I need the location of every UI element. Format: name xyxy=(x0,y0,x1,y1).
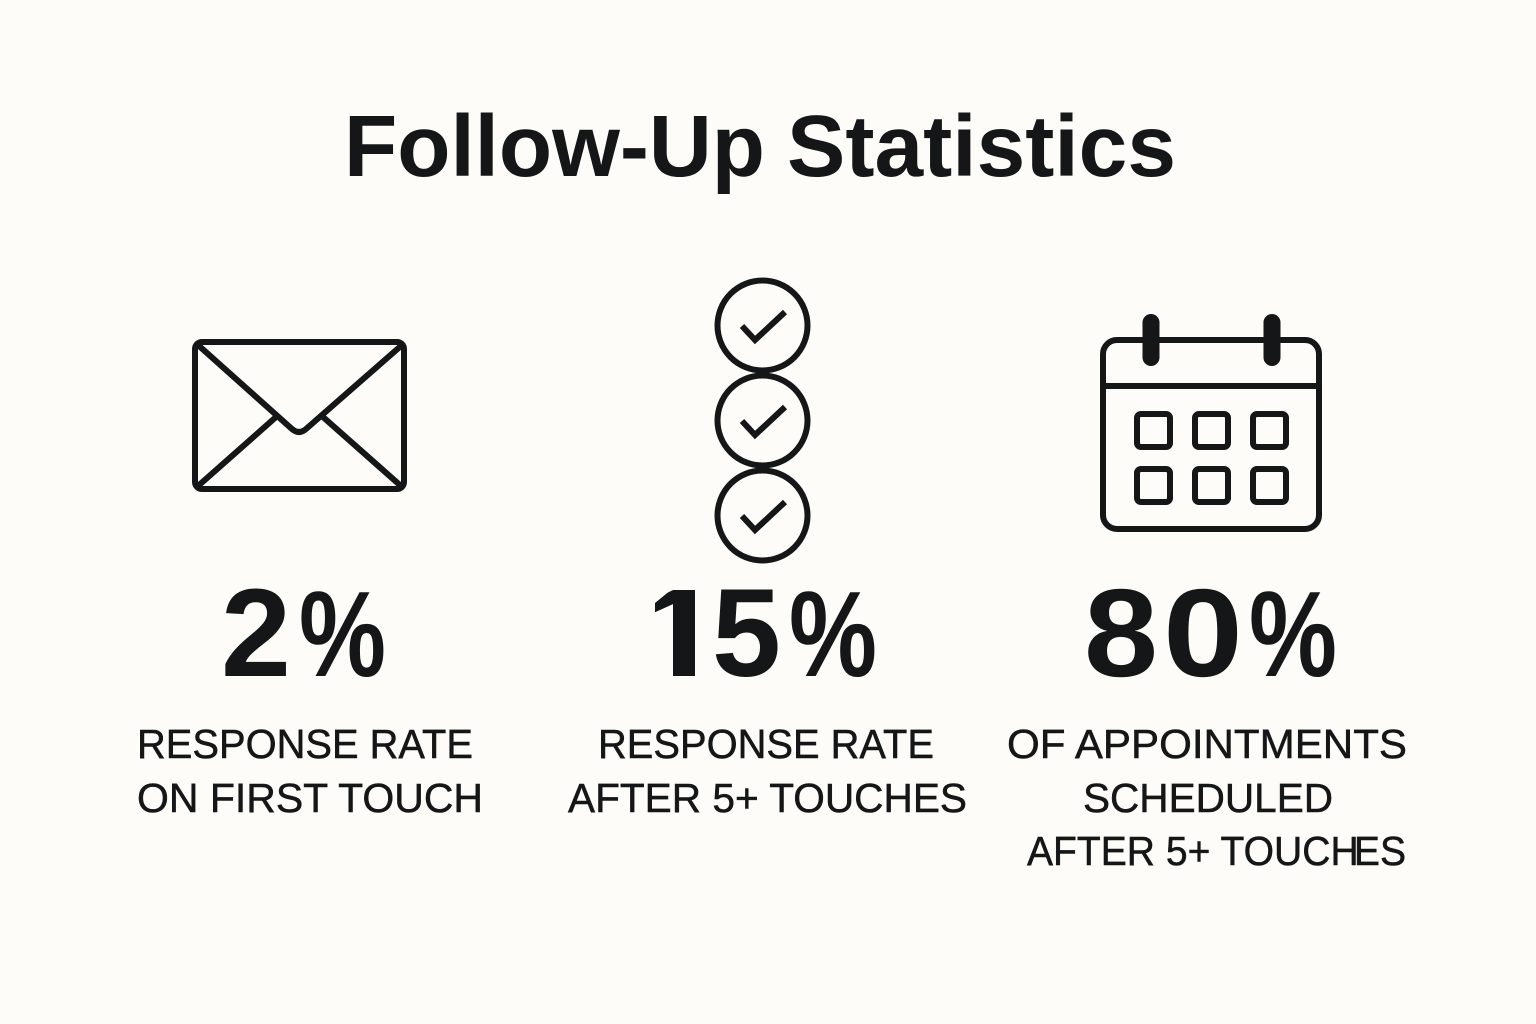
label: appointments scheduled after 5+ touches: AFTER 5+ TOUCHES xyxy=(1027,828,1406,874)
statistic: 2%: 2 xyxy=(221,564,291,703)
label: appointments scheduled after 5+ touches xyxy=(1007,721,1407,874)
label: response rate after 5+ touches xyxy=(568,721,967,821)
statistic: 2%: % xyxy=(299,566,386,702)
statistic: 80%: 0 xyxy=(1163,564,1243,703)
title: Follow-Up xyxy=(344,98,765,195)
statistic: 15%: 1 xyxy=(632,564,727,703)
label: appointments scheduled after 5+ touches: SCHEDULED xyxy=(1083,775,1333,821)
statistic: 15% xyxy=(655,590,874,677)
label: response rate on first touch: RESPONSE RATE xyxy=(137,721,473,767)
statistic: 80%: 8 xyxy=(1084,564,1158,703)
icon: envelope xyxy=(195,342,404,489)
icon: calendar xyxy=(1103,322,1319,529)
statistic: 15%: % xyxy=(789,566,877,702)
label: response rate after 5+ touches: AFTER 5+ TOUCHES xyxy=(568,775,967,821)
label: response rate on first touch: ON FIRST TOUCH xyxy=(137,775,483,821)
statistic: 15%: 5 xyxy=(712,564,781,703)
icon: three check circles xyxy=(718,280,808,560)
label: appointments scheduled after 5+ touches: OF APPOINTMENTS xyxy=(1007,721,1407,767)
label: response rate after 5+ touches: RESPONSE RATE xyxy=(598,721,934,767)
statistic: 2% xyxy=(221,564,386,703)
title: Statistics xyxy=(787,98,1176,195)
statistic: 80% xyxy=(1084,564,1337,703)
statistic: 80%: % xyxy=(1249,566,1337,702)
label: response rate on first touch xyxy=(137,721,483,821)
